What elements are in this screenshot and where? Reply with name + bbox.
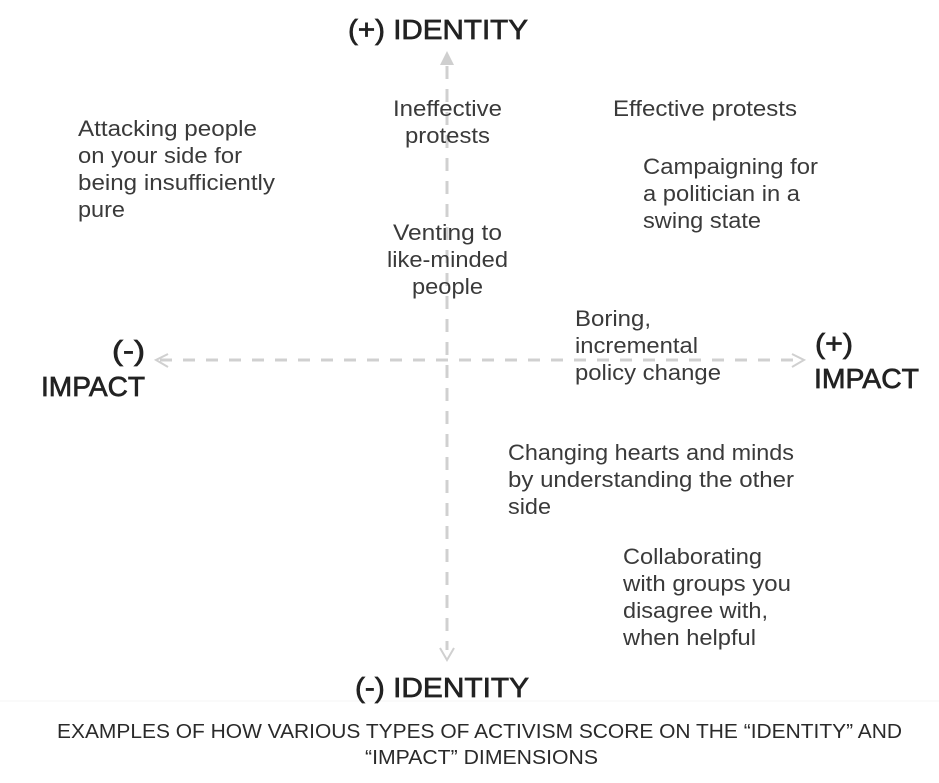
text: collaborating with groups: disagree with, (623, 598, 768, 623)
heading: negative impact (41, 335, 145, 402)
caption (57, 720, 902, 769)
text: changing hearts and minds (508, 440, 794, 519)
text: collaborating with groups: when helpful (622, 625, 756, 650)
text: attacking people: pure (78, 197, 125, 222)
text: effective protests: Effective protests (613, 96, 797, 121)
text: campaigning for a politician (643, 154, 818, 233)
heading: positive impact: (+) (815, 328, 853, 359)
text: boring incremental policy change: incremental (575, 333, 698, 358)
heading: positive impact: IMPACT (814, 363, 919, 394)
text: venting to like-minded people (387, 220, 508, 299)
text: ineffective protests (393, 96, 502, 148)
heading: negative identity: (-) IDENTITY (355, 672, 529, 703)
horizontal axis arrow (156, 354, 804, 367)
text: collaborating with groups: Collaborating (623, 544, 762, 569)
heading: positive identity: (+) IDENTITY (348, 14, 528, 45)
text: boring incremental policy change: Boring, (575, 306, 651, 331)
heading: negative impact: IMPACT (41, 371, 145, 402)
caption: EXAMPLES OF HOW VARIOUS TYPES OF ACTIVISM SCORE ON THE “IDENTITY” AND (57, 720, 902, 743)
text: changing hearts and minds: side (508, 494, 551, 519)
text: collaborating with groups: with groups you (622, 571, 791, 596)
text: attacking people (78, 116, 275, 222)
caption: “IMPACT” DIMENSIONS (365, 746, 598, 769)
text: changing hearts and minds: Changing hearts and minds (508, 440, 794, 465)
text: changing hearts and minds: by understanding the other (508, 467, 794, 492)
text: ineffective protests: protests (405, 123, 490, 148)
heading: negative impact: (-) (112, 335, 145, 366)
text: campaigning for a politician: Campaigning for (643, 154, 818, 179)
text: attacking people: Attacking people (78, 116, 257, 141)
heading: positive impact (814, 328, 919, 394)
text: attacking people: on your side for (78, 143, 242, 168)
text: ineffective protests: Ineffective (393, 96, 502, 121)
text: venting to like-minded people: Venting to (393, 220, 502, 245)
text: boring incremental policy change (575, 306, 721, 385)
text: venting to like-minded people: like-minded (387, 247, 508, 272)
text: boring incremental policy change: policy change (575, 360, 721, 385)
chart: identity and impact axes (156, 51, 804, 660)
text: campaigning for a politician: a politician in a (643, 181, 801, 206)
text: campaigning for a politician: swing state (643, 208, 761, 233)
text: attacking people: being insufficiently (78, 170, 275, 195)
vertical axis arrow (440, 51, 454, 660)
text: collaborating with groups (622, 544, 791, 650)
text: venting to like-minded people: people (412, 274, 483, 299)
